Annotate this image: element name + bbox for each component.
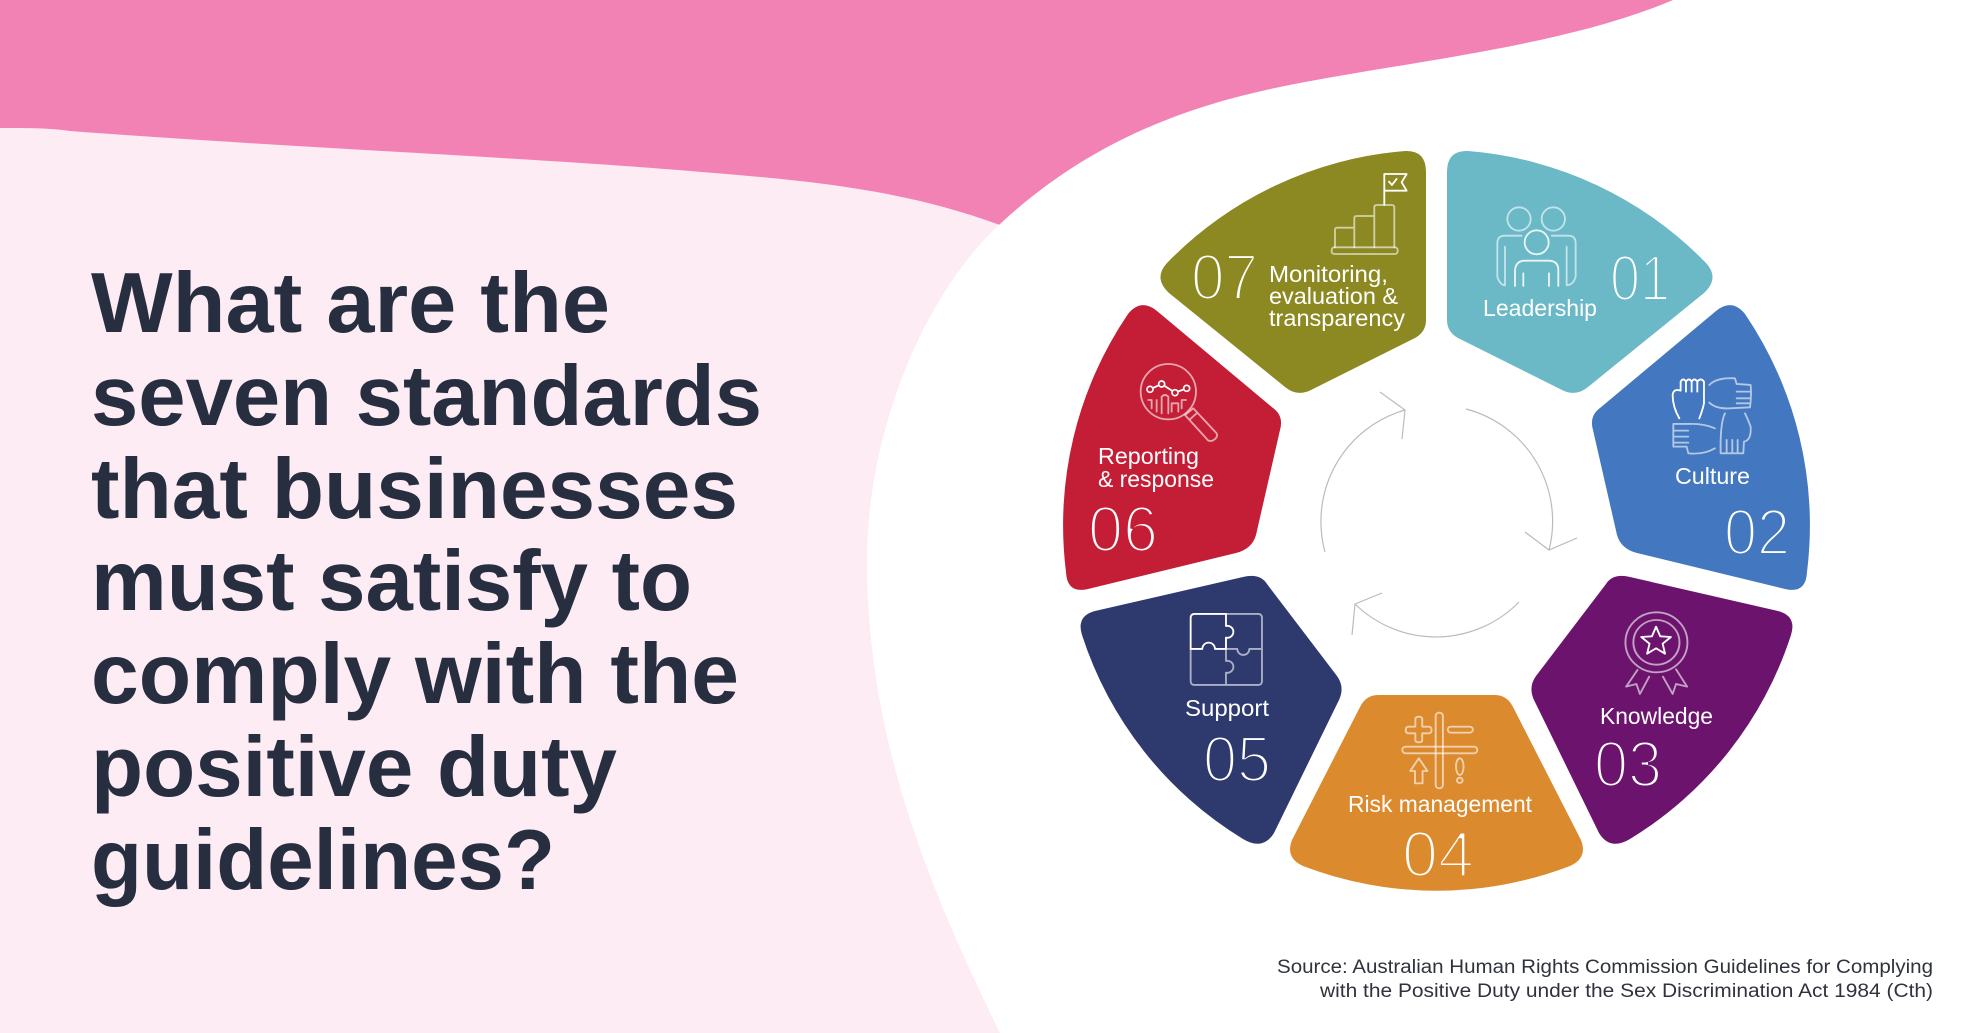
background: pink band bbox=[0, 0, 1970, 400]
source note bbox=[1277, 957, 1933, 1002]
label bbox=[1098, 443, 1214, 492]
segment shape 05 bbox=[1081, 576, 1342, 844]
title: seven standards bbox=[91, 349, 762, 444]
number 01: 01 bbox=[1610, 242, 1670, 314]
label: transparency bbox=[1269, 305, 1405, 331]
title bbox=[91, 256, 762, 908]
background: light pink panel bbox=[0, 128, 1000, 1033]
label: Culture bbox=[1675, 463, 1750, 489]
icon: magnifier with chart bbox=[1141, 364, 1217, 441]
label: evaluation & bbox=[1269, 283, 1398, 309]
segment shape 03 bbox=[1531, 576, 1792, 844]
circular arrows bbox=[1321, 392, 1577, 637]
title: positive duty bbox=[91, 720, 617, 815]
segment shape 01 bbox=[1447, 151, 1713, 393]
segment shape 06 bbox=[1063, 305, 1281, 590]
icon: award bbox=[1625, 612, 1687, 694]
segment 05: Support bbox=[1081, 576, 1342, 844]
segment 04: Risk management bbox=[1290, 695, 1583, 891]
label: Leadership bbox=[1483, 295, 1597, 321]
icon: hands bbox=[1673, 378, 1751, 454]
segment shape 02 bbox=[1592, 305, 1810, 590]
number 05: 05 bbox=[1203, 722, 1271, 796]
number 07: 07 bbox=[1191, 240, 1258, 314]
segment shape 07 bbox=[1160, 151, 1426, 393]
icon: risk matrix bbox=[1402, 713, 1477, 788]
title: must satisfy to bbox=[91, 534, 692, 629]
source note: Source: Australian Human Rights Commission Guidelines for Complying bbox=[1277, 957, 1933, 978]
segment shape 04 bbox=[1290, 695, 1583, 891]
icon: puzzle bbox=[1191, 614, 1262, 685]
title: that businesses bbox=[91, 442, 738, 537]
label: Monitoring, bbox=[1269, 261, 1388, 287]
number 06: 06 bbox=[1088, 492, 1158, 566]
number 04: 04 bbox=[1402, 818, 1474, 890]
segment 03: Knowledge bbox=[1531, 576, 1792, 844]
icon: bars and flag bbox=[1332, 174, 1407, 254]
number 02: 02 bbox=[1724, 496, 1790, 568]
label: Knowledge bbox=[1600, 703, 1713, 729]
background: white panel bbox=[867, 0, 1970, 1033]
source note: with the Positive Duty under the Sex Discrimination Act 1984 (Cth) bbox=[1319, 981, 1933, 1002]
label: Reporting bbox=[1098, 443, 1199, 469]
segment 07: Monitoring, evaluation & transparency bbox=[1160, 151, 1426, 393]
segment 02: Culture bbox=[1592, 305, 1810, 590]
icon: people bbox=[1497, 207, 1576, 286]
title: comply with the bbox=[91, 627, 739, 722]
title: guidelines? bbox=[91, 813, 555, 908]
label: & response bbox=[1098, 466, 1214, 492]
number 03: 03 bbox=[1594, 728, 1662, 800]
segment 06: Reporting & response bbox=[1063, 305, 1281, 590]
label: Support bbox=[1185, 695, 1270, 721]
label: Risk management bbox=[1348, 791, 1533, 817]
segment 01: Leadership bbox=[1447, 151, 1713, 393]
title: What are the bbox=[91, 256, 610, 351]
label bbox=[1269, 261, 1405, 331]
